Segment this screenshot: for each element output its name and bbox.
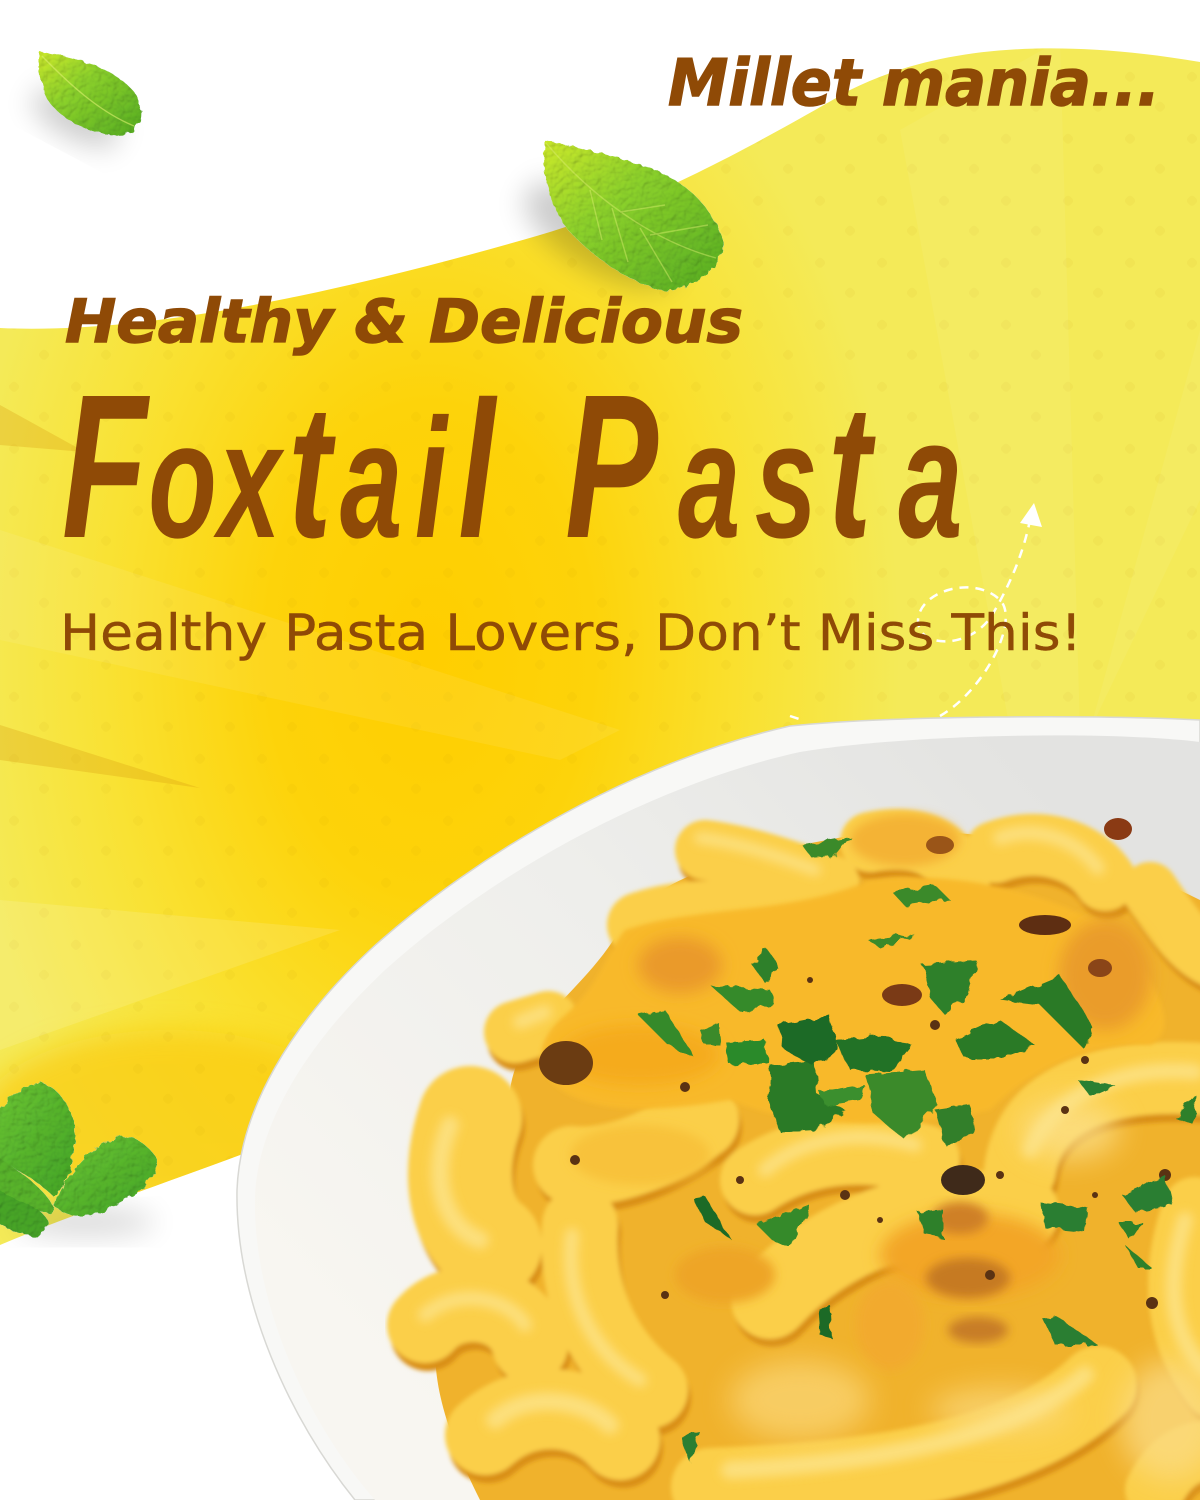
- title: Foxtail Pasta: l: [458, 362, 498, 579]
- spices: [539, 818, 1171, 1309]
- leaf: top left: [24, 52, 141, 158]
- pasta highlights: [425, 833, 1200, 1470]
- heading: Healthy and Delicious: Healthy & Delicious: [65, 287, 743, 357]
- tagline: Healthy Pasta Lovers, Don’t Miss This!: [60, 604, 1082, 662]
- title: Foxtail Pasta: a: [898, 383, 963, 573]
- title: Foxtail Pasta: P: [565, 352, 659, 581]
- title: Foxtail Pasta: [62, 352, 963, 581]
- parsley: [638, 836, 1196, 1462]
- bowl: [237, 717, 1200, 1500]
- dashed arrow: [790, 503, 1042, 720]
- pasta: [425, 814, 1200, 1500]
- title: Foxtail Pasta: F: [62, 352, 150, 581]
- title: Foxtail Pasta: o: [148, 387, 217, 572]
- macaroni shells: [425, 839, 1200, 1498]
- cheese crust: [541, 814, 1164, 1370]
- title: Foxtail Pasta: i: [415, 383, 449, 573]
- food base: [435, 830, 1200, 1500]
- title: Foxtail Pasta: a: [340, 387, 402, 572]
- creamy sauce: [730, 1100, 1200, 1480]
- leaf: centre: [509, 141, 723, 308]
- title: Foxtail Pasta: a: [678, 387, 740, 572]
- title: Foxtail Pasta: s: [755, 387, 817, 572]
- title: Foxtail Pasta: t: [828, 366, 876, 578]
- title: Foxtail Pasta: t: [288, 366, 336, 578]
- title: Foxtail Pasta: x: [213, 387, 285, 572]
- leaf cluster: bottom left: [0, 1083, 159, 1237]
- heading: Millet mania: Millet mania...: [668, 47, 1160, 121]
